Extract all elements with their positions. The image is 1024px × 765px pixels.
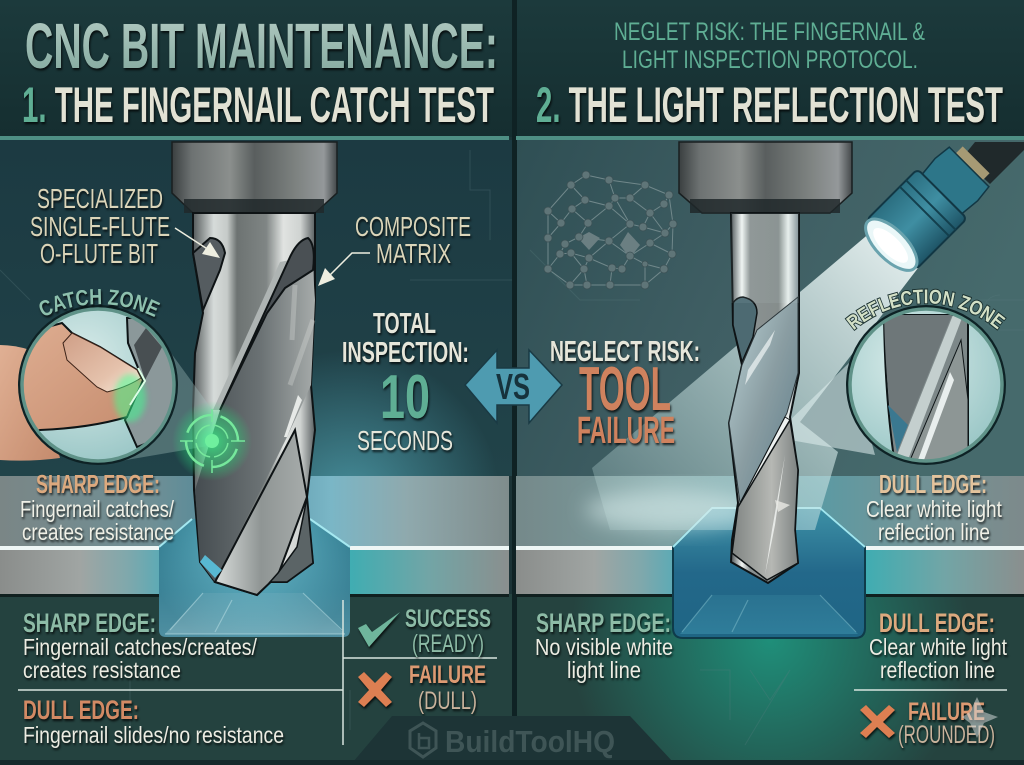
blueprint background lines: [0, 150, 1024, 745]
lower flute: [270, 498, 313, 582]
callout: total inspection time: INSPECTION:: [342, 337, 469, 369]
callout: neglect risk: TOOL: [579, 355, 671, 424]
lower twist: [732, 420, 798, 580]
callout: catch zone label: CATCH ZONE: [39, 289, 162, 320]
callout: reflection zone magnifier: [848, 307, 1004, 465]
flute dark wedge top: [193, 238, 225, 310]
table dividers: [18, 600, 497, 745]
subtitle: neglect risk protocol: LIGHT INSPECTION PROTOCOL.: [622, 46, 918, 74]
icon: specialized bit, left: [172, 142, 337, 595]
result: failure dull: [358, 661, 486, 715]
result: success: SUCCESS: [405, 605, 491, 633]
callout: neglect risk: NEGLECT RISK:: [550, 336, 700, 368]
icon: sparkle watermark: [962, 697, 998, 738]
result: failure rounded: [860, 698, 995, 749]
label: sharp edge on plate: [20, 469, 174, 545]
result: failure dull: (DULL): [418, 687, 477, 715]
text block: light test sharp edge: light line: [567, 657, 641, 683]
leaf flute: [733, 297, 757, 362]
tool holder: [679, 142, 852, 213]
label: specialized single-flute bit: [30, 183, 170, 269]
footer badge: BuildToolHQ: [0, 716, 1024, 765]
label: dull edge on plate: reflection line: [878, 519, 990, 545]
result: success: [358, 605, 491, 658]
callout: neglect risk: [550, 336, 700, 452]
subtitle: neglect risk protocol: NEGLET RISK: THE FINGERNAIL &: [614, 18, 925, 46]
callout: reflection zone label: REFLECTION ZONE: [844, 288, 1007, 331]
arrow: to composite matrix: [318, 253, 370, 286]
callout: catch zone magnifier: [0, 307, 180, 463]
label: sharp edge on plate: SHARP EDGE:: [36, 469, 160, 499]
text block: light test dull edge: reflection line: [880, 657, 995, 683]
icon: VS double arrow: VS: [496, 366, 530, 407]
label: sharp edge on plate: creates resistance: [22, 519, 174, 545]
callout: total inspection time: TOTAL: [373, 308, 436, 340]
label: composite matrix: [355, 211, 471, 269]
result divider: [854, 689, 1007, 691]
result: failure dull: FAILURE: [409, 661, 486, 689]
footer badge: BuildToolHQ: BuildToolHQ: [445, 724, 615, 759]
text block: light test dull edge: [869, 608, 1008, 683]
label: specialized single-flute bit: O-FLUTE BIT: [40, 238, 158, 269]
icon: light beam from flashlight: [585, 226, 918, 530]
tool holder: [172, 142, 337, 213]
text block: fingernail test results: [23, 608, 284, 748]
callout: total inspection time: SECONDS: [357, 425, 453, 456]
light cutting face: [215, 430, 307, 595]
text block: light test sharp edge: SHARP EDGE:: [536, 608, 671, 638]
bit body: [729, 213, 799, 583]
magnifier connector: reflection zone to bit: [785, 362, 875, 455]
arrow: to single-flute bit: [175, 228, 220, 258]
text block: fingernail test results: DULL EDGE:: [23, 695, 139, 725]
icon: VS double arrow: [465, 350, 562, 423]
dark flute leaf: [220, 238, 314, 410]
icon: composite molecular matrix: [544, 171, 677, 289]
label: dull edge on plate: [866, 469, 1002, 545]
label: sharp edge on plate: Fingernail catches/: [20, 496, 174, 522]
title: CNC bit maintenance: CNC BIT MAINTENANCE:: [25, 10, 498, 82]
text block: fingernail test results: SHARP EDGE:: [23, 608, 156, 638]
label: composite matrix: COMPOSITE: [355, 211, 471, 242]
text block: fingernail test results: Fingernail slides/no resistance: [23, 722, 284, 748]
callout: neglect risk: FAILURE: [577, 410, 675, 452]
label: composite matrix: MATRIX: [376, 238, 451, 269]
subtitle: neglect risk protocol: [614, 18, 925, 74]
icon: finger outside the magnifier: [0, 345, 60, 461]
callout: total inspection time: [342, 308, 469, 456]
upper twist: [729, 297, 798, 503]
machined metal plate: left: [0, 476, 509, 637]
result: failure rounded: FAILURE: [908, 698, 985, 726]
body lower right shading: [195, 270, 315, 582]
streak between twists: [738, 417, 790, 507]
text block: fingernail test results: creates resistance: [23, 657, 181, 683]
icon: twist drill bit, right: [679, 142, 852, 583]
magnifier connector: catch zone to target: [115, 338, 214, 462]
panel: header band: [0, 0, 1024, 140]
text block: fingernail test results: Fingernail catches/creates/: [23, 634, 258, 660]
result: success: (READY): [412, 630, 484, 658]
label: specialized single-flute bit: SPECIALIZED: [37, 183, 163, 214]
machined metal plate: right: [516, 476, 1024, 638]
icon: flashlight: [856, 135, 1024, 280]
panel: right inspection scene background: [512, 0, 1024, 765]
label: specialized single-flute bit: SINGLE-FLUTE: [30, 211, 170, 242]
text block: light test sharp edge: [535, 608, 673, 683]
bit body: [193, 213, 315, 595]
icon: green target marker: [172, 401, 252, 481]
heading: test 1: 1. THE FINGERNAIL CATCH TEST: [22, 77, 494, 133]
callout: total inspection time: 10: [380, 363, 430, 432]
text block: light test sharp edge: No visible white: [535, 634, 673, 660]
